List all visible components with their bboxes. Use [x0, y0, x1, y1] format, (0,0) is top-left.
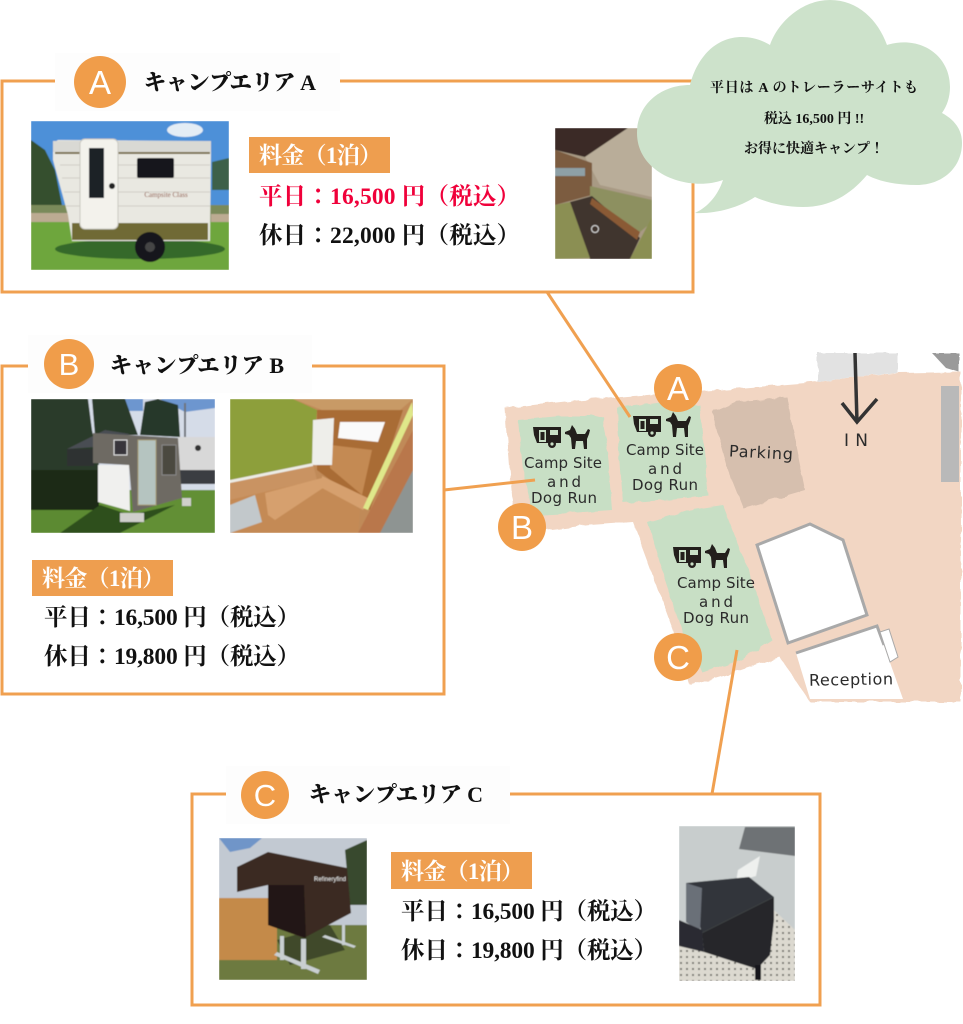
corner gray	[932, 353, 959, 372]
panel B border	[2, 366, 444, 694]
icon: trailer and dog a	[633, 412, 691, 437]
weekday price A: 平日：16,500 円（税込）	[259, 183, 520, 210]
bubble text line 2: 税込 16,500 円 !!	[764, 111, 864, 127]
speech bubble callout	[637, 0, 962, 213]
heading C: キャンプエリア C	[309, 782, 483, 807]
bubble text line 3: お得に快適キャンプ！	[744, 140, 884, 157]
map ground	[505, 372, 961, 702]
connector: panel B to map	[444, 480, 535, 490]
zone b label 2: and	[547, 473, 581, 491]
zone b	[518, 416, 612, 515]
reception edge	[796, 626, 884, 653]
holiday price B: 休日：19,800 円（税込）	[44, 643, 300, 670]
price tag B	[32, 560, 173, 596]
heading B	[28, 335, 312, 393]
panel: camp area B	[2, 335, 444, 694]
map marker A	[654, 364, 702, 412]
label: parking: Parking	[729, 441, 793, 464]
weekday price C: 平日：16,500 円（税込）	[401, 898, 657, 925]
photo: cabin exterior	[31, 399, 215, 533]
map marker B: B	[511, 509, 533, 546]
zone c label: Camp Site	[677, 574, 755, 592]
arrow: entrance	[842, 353, 877, 422]
zone c label 2: and	[699, 593, 733, 611]
zone a label 3: Dog Run	[632, 476, 698, 494]
map marker C: C	[666, 639, 690, 676]
side gray	[941, 386, 959, 482]
price tag A	[249, 137, 390, 173]
photo: cabin interior	[230, 399, 413, 533]
zone a label 2: and	[648, 460, 682, 478]
label: reception: Reception	[809, 669, 893, 690]
bubble text line 1: 平日は A のトレーラーサイトも	[710, 79, 918, 96]
heading B: B	[59, 347, 79, 382]
connector: panel A to map	[547, 292, 630, 417]
heading A: キャンプエリア A	[144, 70, 316, 95]
price tag A: 料金（1泊）	[259, 143, 382, 168]
reception annex	[880, 629, 898, 662]
zone a label: Camp Site	[626, 441, 704, 459]
zone c	[648, 505, 772, 673]
panel: camp area C	[192, 766, 820, 1005]
price tag C	[391, 852, 532, 889]
holiday price C: 休日：19,800 円（税込）	[401, 937, 657, 964]
weekday price B: 平日：16,500 円（税込）	[44, 604, 300, 631]
connector: panel C to map	[712, 650, 737, 794]
bubble shape	[637, 0, 962, 213]
heading B: キャンプエリア B	[110, 353, 284, 378]
reception building	[796, 626, 903, 699]
white building	[757, 524, 867, 643]
photo: cabin C exterior: Refineryfind	[314, 877, 346, 883]
map: campground site plan	[505, 353, 961, 702]
heading A	[55, 53, 340, 111]
holiday price A: 休日：22,000 円（税込）	[259, 222, 520, 249]
icon: trailer and dog c	[673, 544, 730, 568]
parking	[712, 397, 805, 508]
heading C: C	[254, 778, 276, 813]
zone b label: Camp Site	[524, 454, 602, 472]
map marker A: A	[667, 370, 689, 407]
photo: trailer interior	[555, 128, 652, 259]
price tag B: 料金（1泊）	[42, 566, 165, 591]
panel C border	[192, 794, 820, 1005]
zone b label 3: Dog Run	[531, 489, 597, 507]
panel: camp area A	[2, 53, 693, 292]
map marker B	[498, 503, 546, 551]
photo: trailer	[31, 121, 229, 270]
label: IN: IN	[844, 431, 868, 451]
road gray top	[818, 353, 898, 382]
zone c label 3: Dog Run	[683, 609, 749, 627]
price tag C: 料金（1泊）	[401, 859, 524, 884]
panel A border	[2, 81, 693, 292]
photo: cabin C exterior	[219, 838, 367, 980]
photo: cabin C interior sofa	[679, 826, 795, 981]
photo: trailer: Campsite Class	[144, 191, 188, 199]
heading A: A	[89, 64, 111, 101]
map marker C	[654, 633, 702, 681]
icon: trailer and dog b	[533, 425, 590, 449]
zone a	[617, 402, 708, 503]
heading C	[226, 766, 510, 824]
